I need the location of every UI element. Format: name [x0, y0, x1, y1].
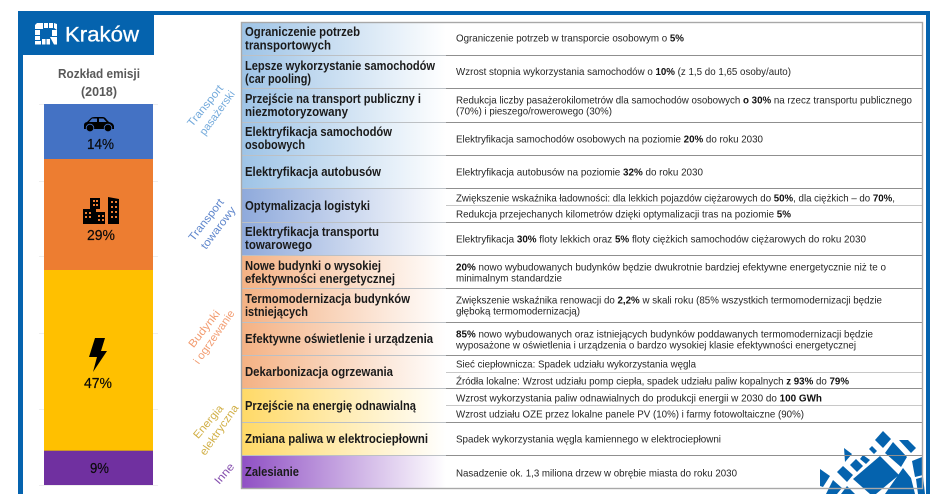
- label 14%: 14%: [87, 136, 114, 153]
- measure descriptions: (70%) i pieszego/rowerowego (30%): [456, 106, 612, 118]
- measure descriptions: wyposażone w oświetlenia i urządzenia o bardzo wysokiej klasie efektywności energetycznej: [455, 340, 856, 352]
- icon: lightning bolt: [89, 338, 107, 372]
- label 9%: 9%: [90, 460, 109, 477]
- logo: Kraków: [18, 11, 154, 55]
- measure names: [245, 25, 435, 479]
- measure descriptions: Elektryfikacja 30% floty lekkich oraz 5% floty ciężkich samochodów ciężarowych do roku 2030: [456, 234, 866, 246]
- category label: Energia elektryczna: elektryczna: [198, 402, 242, 458]
- measure descriptions: Redukcja liczby pasażerokilometrów dla samochodów osobowych o 30% na rzecz transportu publicznego: [456, 94, 912, 106]
- measure names: Ograniczenie potrzeb: [245, 25, 360, 39]
- category label: Energia elektryczna: Energia: [191, 402, 227, 441]
- measure descriptions: Ograniczenie potrzeb w transporcie osobowym o 5%: [456, 32, 685, 44]
- category label: Transport pasażerski: Transport: [185, 83, 226, 129]
- measure names: niezmotoryzowany: [245, 105, 348, 119]
- measure names: Zalesianie: [245, 465, 299, 479]
- measure names: Przejście na energię odnawialną: [245, 399, 417, 413]
- measure names: Lepsze wykorzystanie samochodów: [245, 59, 435, 73]
- category label: Transport pasażerski: [185, 83, 238, 138]
- category label: Transport towarowy: Transport: [187, 197, 227, 244]
- measure descriptions: [455, 32, 912, 480]
- measure descriptions: 20% nowo wybudowanych budynków będzie dwukrotnie bardziej efektywne energetycznie niż te o: [456, 262, 886, 274]
- measure names: Dekarbonizacja ogrzewania: [245, 365, 394, 379]
- measure names: Termomodernizacja budynków: [245, 292, 410, 306]
- stacked bar chart: emission shares: [39, 104, 158, 486]
- measure names: osobowych: [245, 138, 305, 152]
- measure descriptions: Zwiększenie wskaźnika renowacji do 2,2% w skali roku (85% wszystkich termomodernizacji będzie: [456, 294, 882, 306]
- measure descriptions: Źródła lokalne: Wzrost udziału pomp ciepła, spadek udziału paliw kopalnych z 93% do 79%: [456, 374, 850, 388]
- table of measures: [241, 22, 922, 488]
- measure names: Elektryfikacja transportu: [245, 225, 379, 239]
- left column gradient rows: [241, 22, 446, 488]
- measure descriptions: Wzrost wykorzystania paliw odnawialnych do produkcji energii w 2030 do 100 GWh: [456, 392, 822, 404]
- icon: Kraków logo mark: [35, 23, 57, 44]
- measure names: Elektryfikacja autobusów: [245, 165, 381, 179]
- measure descriptions: Elektryfikacja samochodów osobowych na poziomie 20% do roku 2030: [456, 134, 763, 146]
- measure descriptions: Spadek wykorzystania węgla kamiennego w elektrociepłowni: [456, 434, 721, 446]
- measure names: transportowych: [245, 38, 331, 52]
- label 47%: 47%: [84, 375, 112, 392]
- measure descriptions: Zwiększenie wskaźnika ładowności: dla lekkich pojazdów ciężarowych do 50%, dla ciężkich – do 70%,: [456, 192, 895, 204]
- label 29%: 29%: [87, 227, 115, 244]
- icon: city buildings: [83, 197, 119, 224]
- measure descriptions: Sieć ciepłownicza: Spadek udziału wykorzystania węgla: [456, 358, 696, 370]
- logo wordmark: Kraków: [65, 22, 139, 46]
- measure names: (car pooling): [245, 72, 311, 86]
- category label: Budynki i ogrzewanie: i ogrzewanie: [192, 308, 238, 367]
- measure names: towarowego: [245, 238, 312, 252]
- measure descriptions: 85% nowo wybudowanych oraz istniejących budynków poddawanych termomodernizacji będzie: [456, 328, 873, 340]
- category label: Transport pasażerski: pasażerski: [197, 89, 238, 138]
- decoration: city map corner: [820, 431, 925, 494]
- measure descriptions: minimalnym standardzie: [456, 272, 562, 284]
- icon: car: [84, 117, 114, 132]
- category label: Inne: Inne: [212, 461, 237, 487]
- category label: Budynki i ogrzewanie: Budynki: [186, 308, 223, 350]
- category label: Transport towarowy: [187, 197, 239, 252]
- measure names: Elektryfikacja samochodów: [245, 125, 392, 139]
- measure names: Zmiana paliwa w elektrociepłowni: [245, 432, 428, 446]
- measure descriptions: Elektryfikacja autobusów na poziomie 32% do roku 2030: [456, 166, 703, 178]
- chart heading: Rozkład emisji: [58, 67, 140, 81]
- table grid lines: [241, 22, 922, 488]
- measure names: Przejście na transport publiczny i: [245, 92, 421, 106]
- measure descriptions: głęboką termomodernizacją): [456, 306, 580, 318]
- measure names: Nowe budynki o wysokiej: [245, 259, 381, 273]
- measure descriptions: Wzrost udziału OZE przez lokalne panele PV (10%) i farmy fotowoltaiczne (90%): [456, 408, 804, 420]
- measure descriptions: Nasadzenie ok. 1,3 miliona drzew w obrębie miasta do roku 2030: [456, 468, 737, 480]
- measure names: Efektywne oświetlenie i urządzenia: [245, 332, 434, 346]
- category label: Transport towarowy: towarowy: [199, 204, 239, 252]
- measure names: efektywności energetycznej: [245, 272, 395, 286]
- measure descriptions: Redukcja przejechanych kilometrów dzięki optymalizacji tras na poziomie 5%: [456, 208, 792, 220]
- measure names: Optymalizacja logistyki: [245, 199, 370, 213]
- chart heading: [58, 67, 140, 99]
- measure names: istniejących: [245, 305, 308, 319]
- measure descriptions: Wzrost stopnia wykorzystania samochodów o 10% (z 1,5 do 1,65 osoby/auto): [456, 66, 791, 78]
- chart heading: (2018): [81, 85, 117, 99]
